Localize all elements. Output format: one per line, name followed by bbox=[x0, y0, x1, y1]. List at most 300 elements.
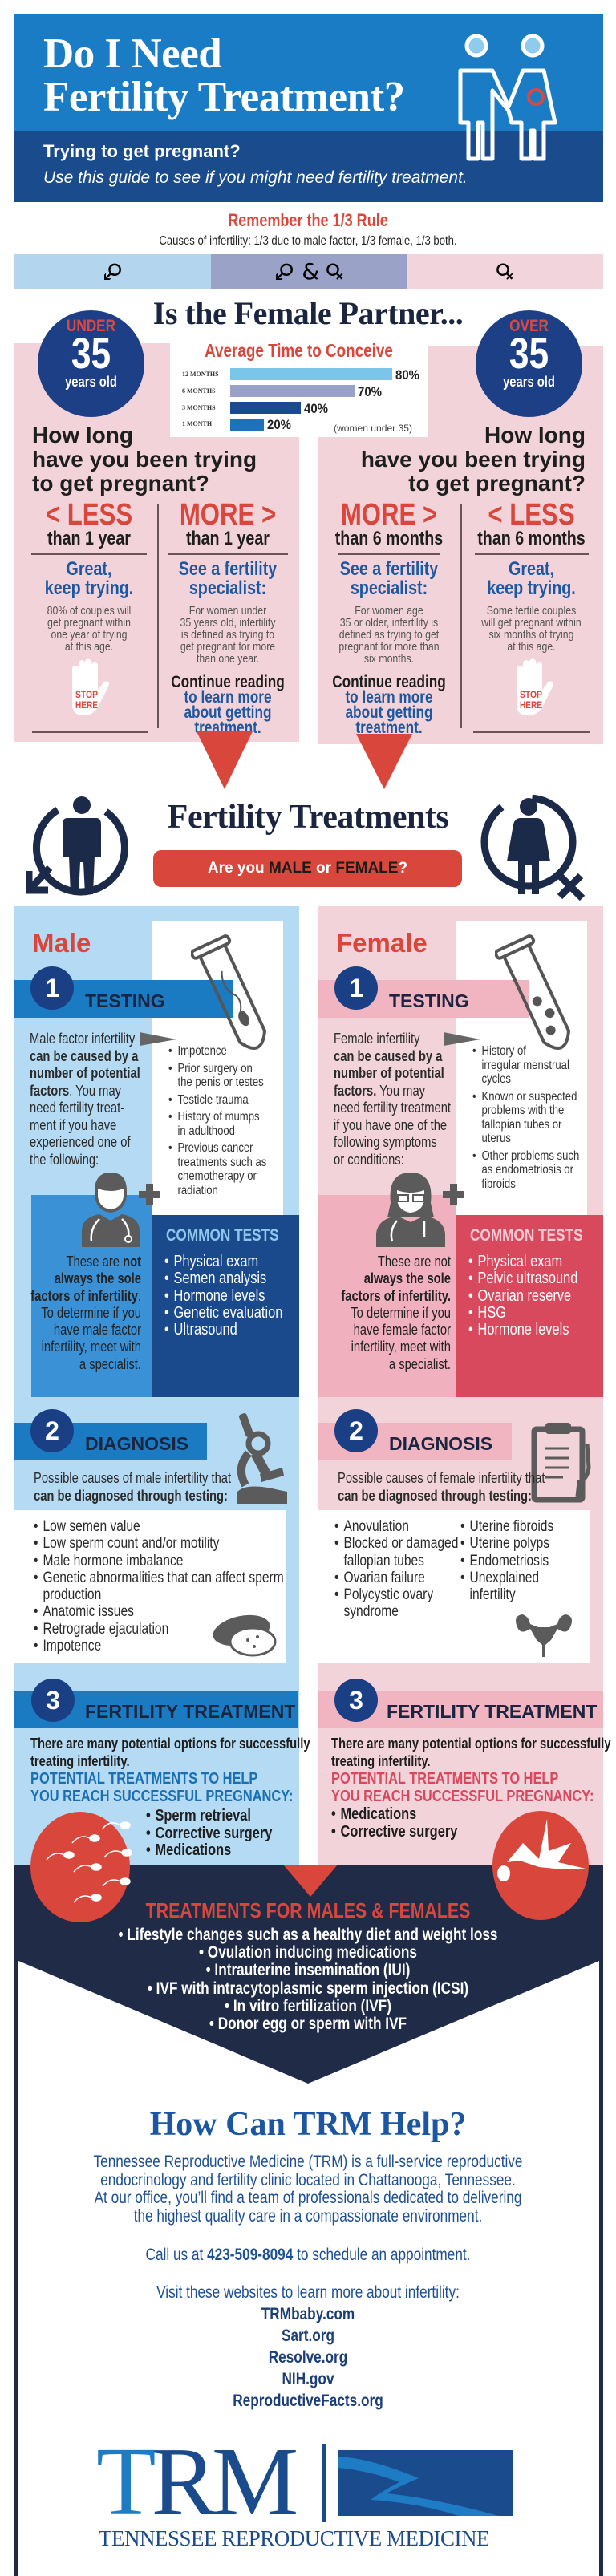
risk list: radiation bbox=[177, 1184, 218, 1197]
icon: test tube bbox=[495, 934, 570, 1050]
doctor box bbox=[318, 1195, 456, 1397]
diagnosis band bbox=[318, 1423, 512, 1460]
treatment list bbox=[146, 1807, 273, 1859]
icon: couple bbox=[459, 34, 557, 160]
heading: fertility treatments: Fertility Treatments bbox=[168, 799, 448, 836]
female segment bbox=[407, 254, 603, 289]
column: more: treatment. bbox=[355, 719, 423, 737]
pill: are you male or female bbox=[153, 850, 462, 887]
risk list: History of mumps bbox=[177, 1110, 260, 1124]
question: to get pregnant? bbox=[408, 471, 586, 496]
title bbox=[43, 30, 405, 120]
intro text: the following: bbox=[30, 1152, 99, 1168]
treatment subhead: YOU REACH SUCCESSFUL PREGNANCY: bbox=[30, 1788, 293, 1805]
both segment bbox=[211, 254, 407, 289]
testing label: TESTING bbox=[85, 990, 165, 1011]
male segment bbox=[14, 254, 211, 289]
column divider bbox=[157, 504, 159, 728]
column: more: specialist: bbox=[189, 577, 266, 599]
circle: under 35: UNDER bbox=[67, 317, 116, 335]
1/3 bar bbox=[14, 254, 603, 289]
diagnosis label: DIAGNOSIS bbox=[389, 1433, 492, 1454]
treatment subhead bbox=[30, 1770, 293, 1805]
risk list: Testicle trauma bbox=[177, 1092, 249, 1107]
icon: stop hand: STOP bbox=[75, 689, 98, 700]
treatment list: Corrective surgery bbox=[340, 1822, 457, 1840]
header panel bbox=[14, 14, 603, 202]
diagnosis intro bbox=[34, 1470, 231, 1504]
header top band bbox=[14, 14, 603, 131]
diagnosis list col 1: Blocked or damaged bbox=[343, 1535, 458, 1552]
treatment intro: There are many potential options for successfully bbox=[30, 1736, 310, 1752]
treatment label: FERTILITY TREATMENT bbox=[387, 1701, 597, 1722]
intro text: Female infertility bbox=[334, 1031, 419, 1047]
intro text: or conditions: bbox=[334, 1152, 404, 1168]
column: more bbox=[168, 498, 288, 737]
bars: 70% bbox=[358, 384, 382, 399]
column: more: pregnant for more than bbox=[338, 640, 440, 654]
diagnosis list col 2: Uterine fibroids bbox=[469, 1518, 553, 1535]
column: more: than one year. bbox=[197, 652, 259, 666]
step 1 bbox=[334, 966, 378, 1010]
diagnosis list: production bbox=[43, 1586, 101, 1603]
diagnosis list col 1: syndrome bbox=[343, 1603, 399, 1620]
bars: 1 MONTH bbox=[182, 420, 213, 427]
question: How long bbox=[484, 423, 586, 448]
about text bbox=[55, 2153, 561, 2226]
treatment label: FERTILITY TREATMENT bbox=[85, 1701, 295, 1722]
column: more: six months. bbox=[364, 652, 414, 666]
risk list: Prior surgery on bbox=[177, 1062, 253, 1075]
websites text: Sart.org bbox=[282, 2327, 334, 2345]
column: less bbox=[31, 498, 147, 654]
column: less: one year of trying bbox=[51, 628, 128, 642]
tests list: Physical exam bbox=[173, 1253, 258, 1270]
note text: have female factor bbox=[354, 1322, 451, 1338]
risk list bbox=[473, 1044, 579, 1190]
bottom line bbox=[32, 731, 148, 733]
tests list bbox=[468, 1253, 578, 1339]
note text: a specialist. bbox=[389, 1356, 451, 1372]
intro text: number of potential bbox=[334, 1065, 444, 1081]
note text: always the sole bbox=[55, 1270, 141, 1286]
intro text: number of potential bbox=[30, 1065, 140, 1081]
column: less: than 6 months bbox=[477, 528, 586, 549]
column: more: specialist: bbox=[351, 577, 428, 599]
bars: 3 MONTHS bbox=[182, 404, 216, 411]
websites text bbox=[55, 2282, 561, 2412]
treatment band bbox=[14, 1691, 298, 1728]
risk list: Other problems such bbox=[481, 1148, 579, 1163]
heading: male: Male bbox=[32, 928, 91, 958]
risk list: fibroids bbox=[481, 1177, 516, 1190]
circle: under 35 bbox=[38, 310, 144, 417]
treatment list bbox=[331, 1806, 489, 1841]
risk list bbox=[168, 1044, 266, 1197]
diagnosis list box bbox=[318, 1510, 590, 1663]
circle: under 35: years old bbox=[65, 374, 117, 390]
intro text bbox=[334, 1031, 451, 1168]
diagnosis list col 2: infertility bbox=[469, 1586, 516, 1603]
note text: To determine if you bbox=[41, 1305, 141, 1321]
logo tagline: TENNESSEE REPRODUCTIVE MEDICINE bbox=[99, 2526, 489, 2550]
risk list: irregular menstrual bbox=[481, 1059, 569, 1071]
diagnosis list col 1: Ovarian failure bbox=[343, 1569, 425, 1586]
column: less: keep trying. bbox=[45, 577, 133, 599]
websites text: TRMbaby.com bbox=[261, 2305, 355, 2323]
white box: risk factors bbox=[152, 921, 283, 1215]
shared treatments list: • Lifestyle changes such as a healthy diet and weight loss bbox=[118, 1926, 498, 1944]
both segment: & bbox=[302, 258, 319, 285]
diagnosis list col 1: Polycystic ovary bbox=[343, 1586, 433, 1603]
circle: under 35: 35 bbox=[71, 330, 111, 378]
treatment subhead: YOU REACH SUCCESSFUL PREGNANCY: bbox=[331, 1788, 594, 1805]
diagnosis list box bbox=[14, 1510, 286, 1663]
column: more: Continue reading bbox=[171, 673, 285, 691]
rule heading: Remember the 1/3 Rule bbox=[228, 210, 388, 230]
intro text: Male factor infertility bbox=[30, 1031, 135, 1047]
common tests box bbox=[456, 1215, 603, 1397]
icon: clipboard bbox=[531, 1423, 590, 1503]
doctor box bbox=[31, 1195, 152, 1397]
both segment: ♀ bbox=[319, 257, 350, 286]
column: more: to learn more bbox=[345, 688, 433, 707]
step 2 bbox=[334, 1409, 378, 1452]
treatment list: Sperm retrieval bbox=[155, 1807, 251, 1825]
common tests title: COMMON TESTS bbox=[470, 1226, 583, 1245]
websites text: Visit these websites to learn more about infertility: bbox=[156, 2283, 460, 2302]
circle: over 35: years old bbox=[503, 374, 555, 390]
question bbox=[361, 423, 586, 496]
icon: female doctor bbox=[376, 1173, 445, 1247]
diagnosis intro: Possible causes of female infertility that bbox=[338, 1470, 545, 1486]
intro text: can be caused by a bbox=[334, 1047, 442, 1063]
shared treatments list: • In vitro fertilization (IVF) bbox=[225, 1997, 391, 2015]
risk list: fallopian tubes or bbox=[481, 1118, 561, 1131]
risk list: as endometriosis or bbox=[481, 1163, 573, 1177]
column: more: to learn more bbox=[184, 688, 272, 707]
panel: under 35 bbox=[14, 343, 299, 742]
bars bbox=[182, 367, 419, 434]
column: less: at this age. bbox=[65, 640, 113, 654]
column: more: get pregnant for more bbox=[180, 640, 275, 654]
heading: how can TRM help: How Can TRM Help? bbox=[150, 2106, 466, 2143]
about text: At our office, you’ll find a team of professionals dedicated to delivering bbox=[95, 2189, 521, 2207]
diagnosis list: Male hormone imbalance bbox=[43, 1553, 183, 1569]
diagnosis list: Anatomic issues bbox=[43, 1603, 134, 1620]
intro text: experienced one of bbox=[30, 1134, 131, 1150]
logo: TRM bbox=[96, 2438, 529, 2550]
treatment intro: treating infertility. bbox=[331, 1753, 431, 1769]
icon: stop hand: HERE bbox=[75, 699, 98, 711]
panel: female bbox=[318, 906, 603, 1865]
websites text: ReproductiveFacts.org bbox=[233, 2392, 383, 2410]
treatment subhead bbox=[331, 1770, 594, 1805]
column: more: MORE > bbox=[180, 498, 276, 532]
step 1 bbox=[30, 966, 74, 1010]
step 3 bbox=[31, 1679, 75, 1722]
risk list: cycles bbox=[481, 1072, 511, 1086]
diagnosis intro: can be diagnosed through testing: bbox=[34, 1487, 228, 1503]
diagnosis intro bbox=[338, 1470, 548, 1505]
note text: a specialist. bbox=[79, 1356, 141, 1372]
testing label: TESTING bbox=[389, 990, 469, 1011]
white box: risk factors bbox=[456, 921, 587, 1215]
logo divider bbox=[322, 2444, 326, 2522]
diagnosis label: DIAGNOSIS bbox=[85, 1433, 188, 1454]
treatment intro bbox=[331, 1736, 594, 1770]
icon: female symbol figure bbox=[481, 794, 586, 901]
about text: endocrinology and fertility clinic located in Chattanooga, Tennessee. bbox=[100, 2170, 516, 2189]
question: How long bbox=[32, 423, 133, 448]
diagnosis list col 2: Endometriosis bbox=[469, 1553, 549, 1569]
step 3 bbox=[334, 1679, 378, 1722]
diagnosis list: Retrograde ejaculation bbox=[43, 1621, 168, 1638]
risk list: Impotence bbox=[177, 1044, 227, 1058]
bars: 80% bbox=[395, 367, 419, 383]
treatment subhead: POTENTIAL TREATMENTS TO HELP bbox=[30, 1770, 257, 1788]
column: more: about getting bbox=[345, 703, 433, 722]
risk list: problems with the bbox=[481, 1104, 564, 1117]
column: more: MORE > bbox=[341, 498, 437, 532]
diagnosis list: Low sperm count and/or motility bbox=[43, 1535, 219, 1552]
diagnosis intro: can be diagnosed through testing: bbox=[338, 1487, 532, 1503]
treatment list: Medications bbox=[340, 1805, 416, 1823]
icon: sperm circle bbox=[30, 1811, 132, 1923]
step 3: 3 bbox=[349, 1686, 363, 1715]
question bbox=[32, 423, 257, 496]
column: more: is defined as trying to bbox=[181, 628, 274, 642]
treatment intro: There are many potential options for successfully bbox=[331, 1736, 611, 1752]
arrow: left down bbox=[197, 731, 253, 789]
intro text: factors. You may bbox=[334, 1083, 425, 1099]
treatment band bbox=[318, 1691, 603, 1728]
shared treatments list: • Ovulation inducing medications bbox=[199, 1943, 417, 1962]
bars: 6 MONTHS bbox=[182, 387, 216, 395]
diagnosis list: Genetic abnormalities that can affect sperm bbox=[43, 1569, 284, 1586]
websites text: NIH.gov bbox=[282, 2370, 334, 2388]
diagnosis list col 2: Uterine polyps bbox=[469, 1535, 549, 1552]
bars: (women under 35) bbox=[334, 423, 412, 434]
about text: the highest quality care in a compassionate environment. bbox=[134, 2207, 482, 2225]
circle: over 35: OVER bbox=[509, 317, 549, 335]
treatment subhead: POTENTIAL TREATMENTS TO HELP bbox=[331, 1770, 558, 1788]
column: more: 35 years old, infertility bbox=[180, 616, 275, 630]
note text: infertility, meet with bbox=[42, 1339, 141, 1355]
column: more: than 6 months bbox=[335, 528, 443, 549]
call text: Call us at 423-509-8094 to schedule an appointment. bbox=[146, 2246, 470, 2264]
diagnosis list: Low semen value bbox=[43, 1518, 140, 1535]
note text: have male factor bbox=[54, 1322, 141, 1338]
tests list: HSG bbox=[477, 1304, 506, 1322]
treatment intro: treating infertility. bbox=[30, 1753, 130, 1769]
icon: microscope bbox=[237, 1413, 287, 1504]
icon: plus bbox=[443, 1184, 464, 1205]
note text bbox=[341, 1254, 451, 1372]
diagnosis list col 1 bbox=[334, 1518, 460, 1621]
tests list: Ultrasound bbox=[173, 1321, 237, 1339]
testing band bbox=[318, 980, 529, 1018]
shared treatments list bbox=[55, 1926, 561, 2033]
column: more: For women under bbox=[189, 604, 266, 618]
logo letters: TRM bbox=[96, 2428, 294, 2536]
rule text: Causes of infertility: 1/3 due to male factor, 1/3 female, 1/3 both. bbox=[159, 234, 457, 248]
step 1: 1 bbox=[45, 974, 59, 1002]
title: Do I Need bbox=[43, 30, 221, 77]
step 3: 3 bbox=[46, 1686, 60, 1715]
treatment list: Medications bbox=[155, 1841, 231, 1859]
risk list: History of bbox=[481, 1044, 526, 1058]
column: more: See a fertility bbox=[179, 558, 277, 580]
shared treatments list: • Donor egg or sperm with IVF bbox=[209, 2015, 407, 2033]
note text: To determine if you bbox=[351, 1305, 451, 1321]
note text: These are not bbox=[378, 1254, 451, 1270]
arrow: pointer bbox=[140, 1032, 176, 1046]
diagnosis list col 1: fallopian tubes bbox=[343, 1553, 424, 1569]
icon: stop hand: STOP bbox=[520, 689, 542, 700]
question: to get pregnant? bbox=[32, 471, 209, 496]
column: less: keep trying. bbox=[487, 577, 576, 599]
column: more: defined as trying to get bbox=[339, 628, 439, 642]
intro text bbox=[30, 1031, 140, 1168]
diagnosis band bbox=[14, 1423, 207, 1460]
common tests title: COMMON TESTS bbox=[166, 1226, 279, 1245]
tagline: Use this guide to see if you might need fertility treatment. bbox=[43, 168, 468, 187]
column: less: will get pregnant within bbox=[481, 616, 582, 630]
column: less: six months of trying bbox=[489, 628, 573, 642]
column divider bbox=[460, 504, 462, 728]
icon: stop hand bbox=[517, 659, 553, 715]
male segment: ♂ bbox=[103, 258, 123, 285]
note text: always the sole bbox=[364, 1270, 451, 1286]
icon: stop hand: HERE bbox=[520, 699, 542, 711]
note text bbox=[30, 1254, 141, 1372]
column: less: Some fertile couples bbox=[487, 604, 576, 618]
risk list: chemotherapy or bbox=[177, 1169, 257, 1183]
subtitle: Trying to get pregnant? bbox=[43, 141, 241, 161]
common tests box bbox=[152, 1215, 299, 1397]
risk list: uterus bbox=[481, 1132, 511, 1145]
column: more: For women age bbox=[355, 604, 424, 618]
bar chart: average time to conceive bbox=[170, 332, 428, 437]
about text: Tennessee Reproductive Medicine (TRM) is a full-service reproductive bbox=[94, 2153, 522, 2171]
websites text: Resolve.org bbox=[269, 2348, 347, 2367]
column: more: Continue reading bbox=[332, 673, 446, 691]
intro text: need fertility treatment bbox=[334, 1100, 451, 1116]
panel: over 35 bbox=[318, 346, 603, 744]
diagnosis list col 1: Anovulation bbox=[343, 1518, 409, 1535]
column: less: Great, bbox=[67, 558, 111, 580]
column: more: than 1 year bbox=[186, 528, 270, 549]
column: more: about getting bbox=[184, 703, 272, 722]
risk list: Known or suspected bbox=[481, 1089, 577, 1104]
icon: male symbol figure bbox=[26, 796, 128, 896]
diagnosis intro: Possible causes of male infertility that bbox=[34, 1470, 231, 1486]
tests list: Hormone levels bbox=[173, 1287, 265, 1305]
note text: factors of infertility. bbox=[341, 1288, 451, 1304]
column: more: See a fertility bbox=[340, 558, 438, 580]
icon: stop hand bbox=[72, 659, 109, 715]
question: have you been trying bbox=[32, 447, 257, 472]
intro text: can be caused by a bbox=[30, 1047, 138, 1063]
icon: uterus bbox=[511, 1613, 577, 1657]
column: less: Great, bbox=[509, 558, 554, 580]
icon: plus bbox=[139, 1184, 160, 1205]
intro text: following symptoms bbox=[334, 1134, 437, 1150]
intro text: if you have one of the bbox=[334, 1116, 447, 1132]
diagnosis list col 2 bbox=[460, 1518, 586, 1603]
step 2: 2 bbox=[45, 1416, 59, 1445]
question: have you been trying bbox=[361, 447, 586, 472]
shared treatments list: • IVF with intracytoplasmic sperm injection (ICSI) bbox=[148, 1979, 468, 1998]
column: less: than 1 year bbox=[47, 528, 131, 549]
both segment: ♂ bbox=[274, 258, 294, 285]
female segment: ♀ bbox=[490, 257, 520, 286]
logo river box bbox=[338, 2450, 513, 2516]
bars: 40% bbox=[304, 401, 328, 416]
column: less: < LESS bbox=[46, 498, 132, 532]
bottom line bbox=[473, 731, 590, 733]
column: more: 35 or older, infertility is bbox=[340, 616, 438, 630]
column: less: get pregnant within bbox=[47, 616, 131, 630]
intro text: ment if you have bbox=[30, 1116, 116, 1132]
arrow: pointer bbox=[444, 1032, 480, 1046]
shared treatments list: • Intrauterine insemination (IUI) bbox=[206, 1961, 410, 1979]
step 2 bbox=[30, 1409, 74, 1452]
treatment list: Corrective surgery bbox=[155, 1824, 272, 1841]
risk list: in adulthood bbox=[177, 1124, 235, 1137]
note text: These are not bbox=[66, 1254, 141, 1270]
circle: over 35: 35 bbox=[509, 330, 549, 378]
column: less bbox=[475, 498, 589, 654]
treatment intro bbox=[30, 1736, 310, 1769]
intro text: need fertility treat- bbox=[30, 1100, 124, 1116]
column: less: < LESS bbox=[488, 498, 575, 532]
risk list: the penis or testes bbox=[177, 1075, 264, 1089]
risk list: treatments such as bbox=[177, 1155, 266, 1169]
tests list: Ovarian reserve bbox=[477, 1287, 571, 1305]
title: Fertility Treatment? bbox=[43, 74, 405, 120]
diagnosis list col 2: Unexplained bbox=[469, 1569, 539, 1586]
circle: over 35 bbox=[476, 310, 582, 417]
risk list: Previous cancer bbox=[177, 1141, 253, 1155]
column: less: 80% of couples will bbox=[47, 604, 131, 618]
step 2: 2 bbox=[349, 1416, 363, 1445]
icon: test tube bbox=[191, 934, 266, 1050]
icon: petri dish bbox=[213, 1615, 276, 1657]
note text: factors of infertility. bbox=[30, 1288, 141, 1304]
note text: infertility, meet with bbox=[351, 1339, 451, 1355]
panel: male bbox=[14, 906, 299, 1865]
arrow: right down bbox=[356, 734, 412, 789]
tests list bbox=[165, 1253, 282, 1339]
column: less: at this age. bbox=[507, 640, 556, 654]
icon: stork circle bbox=[491, 1811, 590, 1923]
pill: are you male or female: Are you MALE or FEMALE? bbox=[208, 860, 407, 877]
diagnosis list bbox=[34, 1518, 284, 1655]
tests list: Hormone levels bbox=[477, 1321, 569, 1339]
heading: female: Female bbox=[336, 928, 428, 958]
column: more bbox=[332, 498, 446, 737]
bars: 20% bbox=[267, 417, 291, 432]
arrow: center down bbox=[283, 1865, 338, 1897]
icon: male doctor bbox=[82, 1173, 140, 1247]
bottom section frame bbox=[0, 1865, 616, 2576]
tests list: Physical exam bbox=[477, 1253, 562, 1270]
diagnosis list: Impotence bbox=[43, 1638, 101, 1655]
tests list: Semen analysis bbox=[173, 1270, 266, 1287]
heading: treatments for males & females: TREATMENTS FOR MALES & FEMALES bbox=[146, 1898, 470, 1922]
